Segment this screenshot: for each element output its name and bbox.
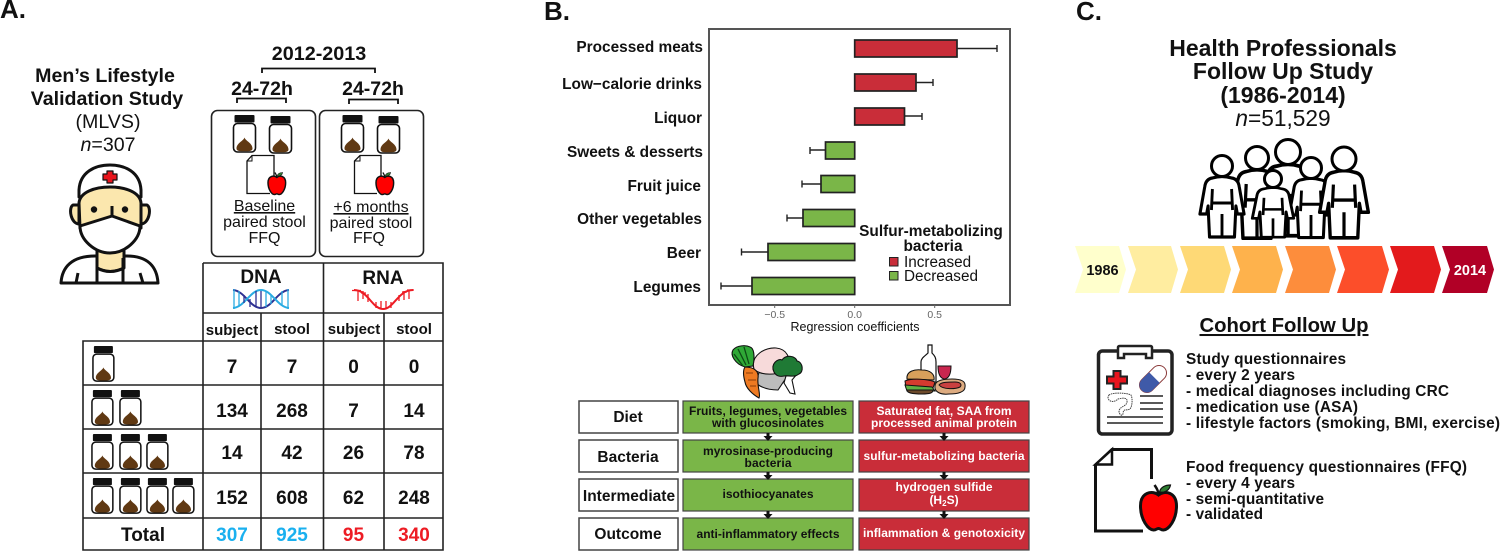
icon: vegetables and fruit [732, 346, 802, 398]
green pathway: Fruits, legumes, vegetables [689, 404, 847, 418]
row: three samples: 14 [221, 443, 243, 464]
icon: food frequency form with apple [1096, 450, 1176, 531]
row: one sample [93, 346, 419, 381]
icon: clipboard questionnaire [1098, 346, 1172, 434]
red pathway: processed animal protein [871, 416, 1017, 430]
row: four samples: 62 [343, 488, 364, 509]
row: four samples: 152 [216, 488, 248, 509]
icon: group of people [1200, 140, 1368, 238]
flow chart: diet to outcome: Diet [613, 409, 643, 426]
bar chart: regression coefficients: Regression coefficients [790, 320, 920, 334]
study title: Men’s Lifestyle [35, 65, 175, 87]
bar chart: regression coefficients: 0.5 [927, 309, 942, 321]
DNA header: DNA [240, 267, 282, 288]
baseline sampling box: FFQ [248, 230, 280, 247]
timeline arrows 1986 to 2014 [1075, 246, 1494, 293]
green pathway: bacteria [744, 456, 792, 470]
red pathway: sulfur-metabolizing bacteria [864, 449, 1025, 463]
red pathway: S) [947, 493, 959, 507]
row: totals: 340 [398, 525, 430, 546]
study title [1169, 35, 1397, 131]
RNA header: RNA [362, 268, 404, 289]
red pathway: 2 [942, 499, 947, 508]
heading: cohort follow up: Cohort Follow Up [1200, 315, 1368, 337]
bar chart: regression coefficients: Liquor [654, 110, 702, 127]
text: study questionnaires: Study questionnaires [1186, 351, 1346, 368]
timeline arrows 1986 to 2014: 1986 [1086, 263, 1119, 279]
text: study questionnaires: - every 2 years [1186, 367, 1295, 384]
bar chart: regression coefficients: −0.5 [764, 309, 785, 321]
study title: (MLVS) [76, 111, 140, 133]
study title: Validation Study [31, 88, 183, 110]
text: study questionnaires: - medication use (ASA) [1186, 399, 1358, 416]
red pathway: inflammation & genotoxicity [863, 526, 1025, 540]
six-month sampling box: paired stool [330, 215, 412, 232]
green pathway: isothiocyanates [722, 487, 814, 501]
row: one sample: 7 [287, 357, 297, 378]
column headings: subject [328, 321, 380, 338]
study title: n=51,529 [1235, 105, 1331, 131]
legend: Increased [904, 254, 971, 271]
row: three samples: 42 [281, 443, 303, 464]
column headings: stool [274, 321, 310, 338]
bar chart: regression coefficients: Fruit juice [627, 178, 701, 195]
flow chart: diet to outcome [579, 401, 1029, 550]
text: study questionnaires [1186, 351, 1500, 432]
panel A: Men's Lifestyle Validation Study [0, 0, 443, 550]
icon: doctor with mask [61, 165, 158, 283]
row: totals: 925 [276, 525, 308, 546]
text: study questionnaires: - medical diagnoses including CRC [1186, 383, 1449, 400]
flow chart: diet to outcome: Bacteria [597, 449, 659, 466]
green pathway: anti-inflammatory effects [696, 527, 840, 541]
bar chart: regression coefficients [562, 29, 1010, 334]
bar chart: regression coefficients: Sweets & desserts [567, 144, 703, 161]
icon: processed food and alcohol [905, 345, 965, 394]
red pathway: (H [929, 493, 942, 507]
year heading and brackets [231, 43, 404, 104]
bar chart: regression coefficients: Low−calorie drinks [562, 76, 702, 93]
bar chart: regression coefficients: Legumes [633, 279, 701, 296]
text: food frequency questionnaires: Food frequency questionnaires (FFQ) [1186, 459, 1467, 476]
baseline sampling box: paired stool [223, 214, 306, 231]
row: totals [121, 525, 430, 546]
legend: Sulfur-metabolizing [859, 223, 1003, 240]
row: totals: 307 [216, 525, 248, 546]
row: one sample: 0 [409, 357, 419, 378]
text: food frequency questionnaires: - validated [1186, 506, 1263, 523]
text: food frequency questionnaires [1186, 459, 1467, 523]
flow chart: diet to outcome: Outcome [594, 526, 662, 543]
legend: bacteria [903, 238, 963, 255]
red pathway [859, 401, 1029, 550]
row: one sample: 0 [348, 357, 359, 378]
column headings [206, 321, 432, 339]
bar chart: regression coefficients: Processed meats [576, 39, 703, 56]
row: four samples: 248 [398, 488, 430, 509]
baseline sampling box: Baseline [234, 198, 295, 215]
legend: Decreased [904, 268, 978, 285]
row: two samples [92, 390, 425, 425]
flow chart: diet to outcome: Intermediate [583, 488, 675, 505]
study title: (1986-2014) [1220, 82, 1346, 108]
study title: Health Professionals [1169, 35, 1397, 61]
RNA header [352, 268, 414, 309]
baseline sampling box [212, 110, 316, 256]
bar chart: regression coefficients: Other vegetables [577, 211, 702, 228]
bar chart: regression coefficients: 0.0 [847, 309, 862, 321]
panel B: diet and sulfur-metabolizing bacteria [544, 0, 1029, 550]
text: food frequency questionnaires: - semi-quantitative [1186, 491, 1324, 508]
year heading and brackets: 2012-2013 [272, 43, 366, 65]
study title: Follow Up Study [1193, 58, 1373, 84]
DNA header [233, 267, 289, 309]
green pathway: myrosinase-producing [703, 444, 833, 458]
text: food frequency questionnaires: - every 4 years [1186, 475, 1295, 492]
row: one sample: 7 [227, 357, 237, 378]
six-month sampling box: +6 months [333, 199, 409, 216]
row labels [579, 401, 678, 550]
row: four samples: 608 [276, 488, 308, 509]
row: three samples: 78 [403, 443, 425, 464]
green pathway: with glucosinolates [711, 416, 824, 430]
column headings: stool [396, 321, 432, 338]
row: two samples: 14 [403, 401, 425, 422]
study title: n=307 [80, 134, 136, 156]
red pathway: Saturated fat, SAA from [876, 404, 1012, 418]
row: three samples [92, 434, 425, 469]
row: totals: Total [121, 525, 165, 546]
column headings: subject [206, 322, 258, 339]
row: three samples: 26 [343, 443, 364, 464]
row: four samples [92, 478, 430, 513]
year heading and brackets: 24-72h [342, 78, 404, 100]
row: two samples: 7 [348, 401, 359, 422]
sample count table [83, 263, 443, 550]
row: two samples: 134 [216, 401, 248, 422]
legend [859, 223, 1003, 285]
year heading and brackets: 24-72h [231, 78, 293, 100]
six-month sampling box: FFQ [353, 230, 385, 247]
row: totals: 95 [343, 525, 364, 546]
timeline arrows 1986 to 2014: 2014 [1454, 263, 1486, 279]
six-month sampling box [320, 110, 424, 256]
panel C: Health Professionals Follow Up Study [1075, 0, 1500, 531]
bar chart: regression coefficients: Beer [667, 245, 701, 262]
green pathway [683, 401, 853, 550]
study title [31, 65, 183, 156]
text: study questionnaires: - lifestyle factors (smoking, BMI, exercise) [1186, 415, 1500, 432]
row: two samples: 268 [276, 401, 308, 422]
red pathway: hydrogen sulfide [896, 480, 993, 494]
